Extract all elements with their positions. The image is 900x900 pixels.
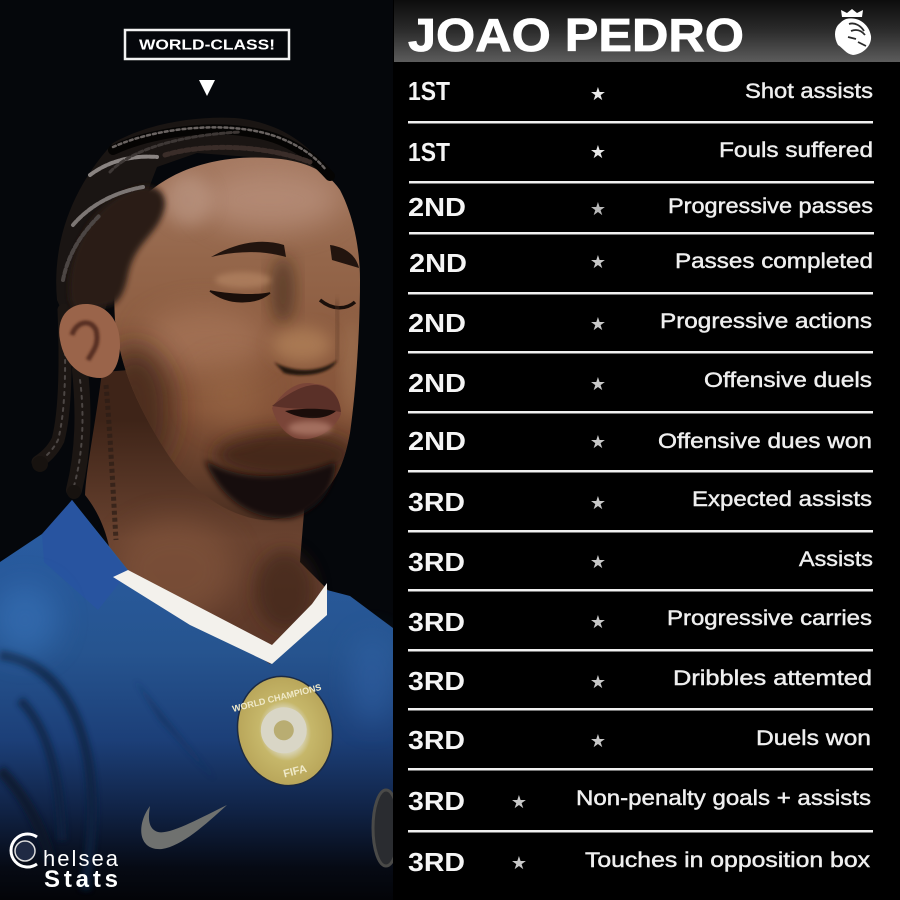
row: Duels won: ★ — [590, 731, 606, 751]
logo: Chelsea Stats — [11, 834, 119, 893]
row: Assists: ★ — [590, 552, 606, 572]
player shirt — [0, 500, 394, 900]
beard — [205, 460, 335, 518]
panel: player photo — [0, 0, 399, 900]
logo: Chelsea Stats: Stats — [44, 866, 118, 893]
shirt club crest — [372, 788, 393, 868]
callout: world-class label: WORLD-CLASS! — [139, 38, 275, 54]
row: Offensive dues won — [408, 426, 873, 472]
row: Duels won: 3RD — [408, 725, 465, 755]
row: Dribbles attemted: 3RD — [408, 666, 465, 696]
player neck — [85, 370, 328, 664]
row: Progressive passes: Progressive passes — [668, 195, 873, 218]
shirt badge: world champions: WORLD CHAMPIONS — [231, 682, 322, 714]
shirt badge: world champions: FIFA — [282, 763, 308, 780]
row: Offensive duels: 2ND — [408, 368, 466, 398]
row: Passes completed — [408, 248, 873, 294]
row: Fouls suffered: 1ST — [408, 137, 450, 167]
arrow: pointing to player — [199, 80, 215, 96]
nose — [272, 300, 338, 375]
row: Passes completed: 2ND — [409, 248, 467, 278]
hair back and braids — [32, 118, 330, 499]
row: Assists: Assists — [799, 548, 873, 571]
row: Offensive dues won: 2ND — [408, 426, 466, 456]
shirt swoosh logo — [141, 805, 227, 849]
row: Offensive duels — [408, 368, 873, 414]
row: Shot assists: 1ST — [408, 76, 450, 106]
row: Fouls suffered: Fouls suffered — [719, 139, 873, 162]
row: Assists: 3RD — [408, 547, 465, 577]
row: Shot assists — [408, 76, 873, 124]
row: Duels won: Duels won — [756, 727, 871, 750]
row: Progressive actions — [408, 308, 873, 354]
row: Touches in opposition box: Touches in opposition box — [585, 849, 871, 872]
face shape — [114, 157, 360, 520]
row: Non-penalty goals + assists: ★ — [511, 792, 527, 812]
row: Offensive dues won: Offensive dues won — [658, 430, 872, 453]
row: Progressive carries: ★ — [590, 612, 606, 632]
panel: header bar — [394, 0, 900, 62]
row: Dribbles attemted: Dribbles attemted — [673, 667, 872, 690]
row: Progressive carries: Progressive carries — [667, 607, 872, 630]
row: Shot assists: Shot assists — [745, 80, 873, 103]
player head — [32, 118, 361, 520]
logo: Chelsea Stats: helsea — [43, 846, 119, 871]
row: Progressive actions: Progressive actions — [660, 310, 872, 333]
row: Passes completed: ★ — [590, 252, 606, 272]
row: Duels won — [408, 725, 873, 770]
row: Dribbles attemted — [408, 666, 873, 710]
row: Touches in opposition box — [408, 847, 871, 877]
mouth — [272, 383, 341, 439]
row: Progressive carries: 3RD — [408, 607, 465, 637]
row: Fouls suffered: ★ — [590, 142, 606, 162]
row: Progressive actions: 2ND — [408, 308, 466, 338]
row: Progressive passes — [408, 192, 874, 234]
row: Touches in opposition box: 3RD — [408, 847, 465, 877]
panel: rankings list — [408, 76, 874, 877]
row: Touches in opposition box: ★ — [511, 853, 527, 873]
cornrow braids — [63, 127, 330, 280]
row: Offensive duels: Offensive duels — [704, 369, 872, 392]
row: Assists — [408, 547, 873, 592]
row: Progressive passes: 2ND — [408, 192, 466, 222]
row: Non-penalty goals + assists — [408, 786, 873, 832]
row: Passes completed: Passes completed — [675, 250, 873, 273]
row: Offensive dues won: ★ — [590, 432, 606, 452]
row: Shot assists: ★ — [590, 84, 606, 104]
eyes closed — [210, 272, 355, 308]
shaved hair fade — [69, 186, 165, 312]
row: Offensive duels: ★ — [590, 374, 606, 394]
ear — [59, 304, 120, 378]
row: Fouls suffered — [408, 137, 874, 184]
title: JOAO PEDRO — [408, 9, 744, 61]
row: Progressive passes: ★ — [590, 199, 606, 219]
row: Non-penalty goals + assists: 3RD — [408, 786, 465, 816]
row: Expected assists: 3RD — [408, 487, 465, 517]
icon: Premier League lion — [835, 9, 871, 55]
eyebrows — [211, 242, 359, 268]
row: Progressive carries — [408, 607, 873, 652]
shirt badge: world champions — [232, 676, 334, 786]
row: Expected assists — [408, 487, 873, 532]
row: Expected assists: Expected assists — [692, 488, 872, 511]
row: Expected assists: ★ — [590, 493, 606, 513]
row: Dribbles attemted: ★ — [590, 672, 606, 692]
row: Non-penalty goals + assists: Non-penalty goals + assists — [576, 787, 871, 810]
row: Progressive actions: ★ — [590, 314, 606, 334]
callout: world-class label — [125, 30, 289, 59]
